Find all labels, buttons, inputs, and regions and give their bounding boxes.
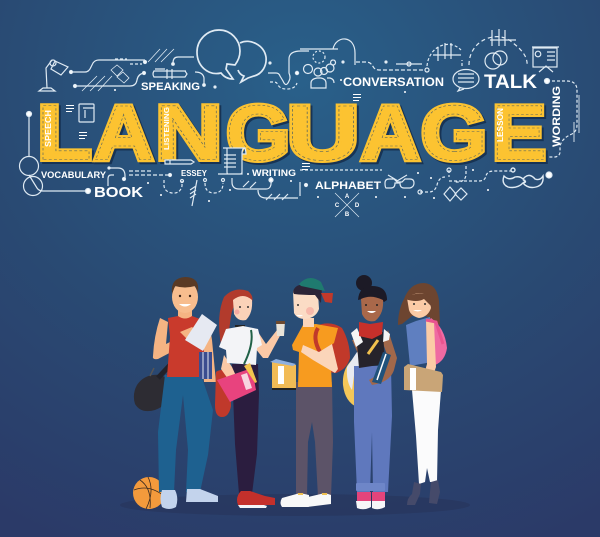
title stitching: L (37, 89, 92, 176)
label: ALPHABET: ALPHABET (315, 180, 381, 192)
icon: document (79, 104, 94, 122)
title stitching: E (492, 89, 546, 176)
person 1: man in red tank (134, 277, 218, 509)
books (199, 352, 212, 379)
label: TALK: TALK (484, 72, 537, 93)
connector lines near lamp (70, 49, 174, 91)
label: BOOK: BOOK (94, 184, 143, 201)
head with bun (356, 275, 387, 321)
shoes (280, 493, 331, 507)
hand on tablet (180, 327, 197, 339)
connector: bottom right (300, 166, 511, 201)
icon: chat bubble (453, 70, 479, 91)
icon: dashed arch with rings (469, 29, 527, 69)
red bag (215, 370, 231, 417)
shoes (357, 492, 385, 502)
legs and heels (407, 480, 440, 505)
label: ESSEY: ESSEY (181, 169, 208, 178)
icon: people group (304, 60, 336, 88)
backpack (316, 323, 350, 373)
icon: pencil (165, 160, 194, 164)
backpack (427, 318, 447, 365)
label: CONVERSATION: CONVERSATION (343, 77, 444, 89)
shirt (219, 326, 262, 365)
title letters: G (226, 90, 290, 177)
icon: A B C D cross (335, 193, 359, 217)
title shadow: A (96, 92, 156, 179)
title letters: L (37, 89, 92, 176)
trousers (296, 382, 333, 497)
label: letters A B C D: D (355, 203, 360, 209)
book (404, 364, 443, 392)
title letters (37, 89, 546, 177)
icon: presentation board (532, 47, 559, 72)
line-art network: bottom middle (164, 177, 300, 206)
scattered dots and short dashes (66, 79, 489, 202)
person 4: woman with red book (343, 275, 397, 509)
title shadow (39, 91, 548, 179)
arms (221, 330, 282, 389)
title letters: A (94, 90, 154, 177)
title shadow: U (288, 92, 362, 179)
title stitching: G (421, 90, 487, 177)
label: letters A B C D (335, 194, 360, 218)
icon: moustache (503, 168, 543, 188)
head (172, 277, 198, 313)
title shadow: G (228, 92, 292, 179)
person 5: woman in blue top (398, 283, 447, 505)
arms and neck (153, 310, 216, 382)
title stitching: G (226, 90, 290, 177)
connector: mid top (342, 43, 462, 72)
icon: pen (153, 57, 216, 88)
icon: scroll paper (218, 148, 246, 174)
basketball (133, 477, 165, 509)
title letters: A (360, 90, 420, 177)
yellow bag (343, 354, 362, 407)
yellow books (272, 361, 296, 389)
jeans (354, 366, 392, 492)
tablet (185, 314, 217, 351)
label: letters A B C D: A (345, 194, 350, 200)
shoes (237, 491, 275, 505)
connector: right side (544, 78, 579, 178)
label: WRITING: WRITING (252, 168, 296, 179)
line-art network: top left (20, 29, 579, 217)
person 2: woman in white shirt (215, 289, 285, 508)
shirt (292, 324, 338, 387)
person 3: man in orange shirt (270, 278, 350, 507)
title shadow: G (423, 92, 489, 179)
title letters: E (492, 89, 546, 176)
red book (359, 322, 383, 339)
label: LISTENING: LISTENING (162, 107, 171, 150)
arm (420, 320, 436, 390)
title shadow: N (157, 92, 225, 179)
jeans (158, 375, 213, 492)
label: VOCABULARY: VOCABULARY (41, 170, 106, 180)
books (372, 352, 391, 384)
backpack strap (315, 328, 320, 352)
trousers (232, 364, 259, 494)
title stitching: A (360, 90, 420, 177)
neck and head (293, 278, 333, 327)
tank top (167, 316, 204, 377)
label: letters A B C D: B (345, 212, 350, 218)
top (406, 317, 432, 366)
title stitching (37, 89, 546, 177)
connector: bubbles to people (268, 39, 355, 89)
title: LANGUAGE (37, 89, 548, 179)
top (356, 332, 385, 368)
title letters: U (286, 90, 360, 177)
face (405, 293, 432, 318)
label: LESSON: LESSON (496, 108, 505, 142)
pink book (217, 368, 256, 402)
word labels (41, 72, 563, 218)
title stitching: A (94, 90, 154, 177)
hair (219, 289, 252, 345)
title shadow: A (362, 92, 422, 179)
arms (352, 330, 397, 385)
label: SPEAKING: SPEAKING (141, 81, 200, 93)
gym bag (134, 348, 186, 411)
title shadow: L (39, 91, 94, 178)
coffee cup (276, 321, 285, 336)
title letters: G (421, 90, 487, 177)
arm (301, 344, 338, 373)
line-art network: bottom left (20, 112, 172, 196)
label: WORDING: WORDING (551, 86, 563, 147)
hair (398, 283, 440, 325)
icon: glasses (385, 175, 414, 188)
icon: desk lamp (39, 60, 68, 91)
white trousers (412, 390, 441, 484)
face (233, 296, 252, 326)
title stitching: U (286, 90, 360, 177)
shoes (160, 489, 218, 509)
floor shadow (120, 494, 470, 516)
title shadow: E (494, 91, 548, 178)
title stitching: N (155, 90, 223, 177)
title letters: N (155, 90, 223, 177)
label: SPEECH: SPEECH (43, 110, 53, 147)
label: letters A B C D: C (335, 203, 340, 209)
icon: speech bubbles (197, 30, 266, 82)
